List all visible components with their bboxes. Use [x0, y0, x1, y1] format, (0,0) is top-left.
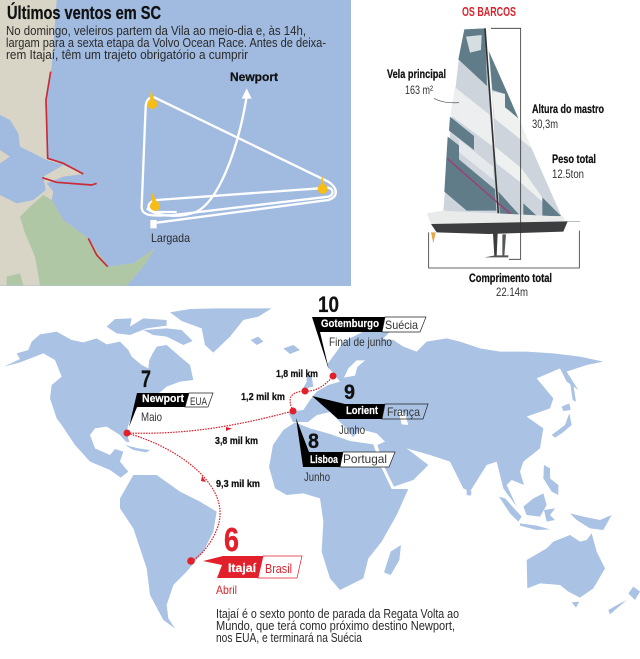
Arctic islands: [107, 318, 167, 335]
callout: stop 9 Lorient: 9: [344, 381, 355, 404]
route: Newport to Lisboa: [127, 411, 293, 433]
callout: stop 8 Lisboa: Junho: [304, 470, 330, 484]
icon: start marker: [150, 220, 157, 228]
Java: [520, 523, 550, 530]
callout: stop 8 Lisboa: [296, 418, 395, 484]
route stops: [124, 372, 336, 565]
Borneo: [523, 493, 547, 517]
text block: closing note: nos EUA, e terminará na Suécia: [216, 631, 362, 645]
jib: [488, 50, 562, 217]
text block: intro: [6, 24, 326, 62]
Greenland: [170, 308, 272, 353]
Australia: [527, 533, 605, 598]
pointer: sail: [434, 98, 459, 103]
callout: stop 6 Itajaí: 6: [224, 521, 239, 558]
Iceland: [283, 345, 300, 354]
icon: arrow head: [242, 88, 252, 99]
callout: stop 9 Lorient: [312, 381, 428, 437]
icon: buoys: [147, 90, 328, 211]
callout: stop 6 Itajaí: Abril: [216, 583, 237, 597]
water: bay and river: [0, 115, 63, 203]
callout: stop 6 Itajaí: Itajaí: [228, 561, 257, 575]
Madagascar: [384, 545, 401, 575]
callout: stop 9 Lorient: Lorient: [346, 405, 378, 417]
callout: stop 10 Gotemburgo: Gotemburgo: [321, 318, 379, 330]
callout: stop 8 Lisboa: 8: [308, 430, 319, 453]
Baltic Sea: [344, 360, 365, 378]
distance labels: [215, 368, 318, 490]
Sri Lanka: [467, 489, 472, 496]
distance labels: 1,2 mil km: [241, 391, 285, 403]
callout: stop 10 Gotemburgo: [312, 292, 426, 370]
keel: [493, 233, 498, 256]
heading: os barcos: OS BARCOS: [462, 5, 516, 19]
logo: [466, 35, 482, 53]
text block: intro: rem Itajaí, têm um trajeto obrigatório a cumprir: [6, 48, 248, 62]
icon: route arrowheads: [201, 427, 232, 482]
Japan: [552, 403, 572, 438]
Sulawesi: [544, 508, 555, 522]
rudder: [431, 232, 436, 243]
main sail: [443, 28, 502, 217]
text block: closing note: Mundo, que terá como próximo destino Newport,: [216, 619, 455, 633]
red lines: protected coast: [42, 72, 108, 267]
callout: stop 7 Newport: EUA: [190, 396, 207, 408]
callout: stop 7 Newport: Newport: [142, 393, 184, 405]
heading: Últimos ventos em SC: [7, 2, 161, 23]
New Guinea: [570, 513, 612, 530]
label: total length: 22.14m: [496, 285, 528, 299]
route: Lorient to Gotemburgo: [305, 376, 333, 391]
Americas: [4, 308, 272, 628]
callout: stop 10 Gotemburgo: Suécia: [385, 318, 418, 332]
routes: [127, 376, 333, 561]
label: main sail: [387, 69, 446, 97]
Eurasia: [288, 338, 603, 507]
mast: [485, 28, 498, 213]
callout: stop 9 Lorient: França: [387, 405, 420, 419]
Africa: [269, 422, 408, 590]
panel: Santa Catarina coastal map: [0, 0, 351, 286]
callout: stop 8 Lisboa: Portugal: [343, 452, 387, 466]
callout: stop 10 Gotemburgo: Final de junho: [329, 335, 392, 349]
label: total weight: 12.5ton: [552, 167, 584, 181]
world map: [4, 308, 640, 628]
label: main sail: Vela principal: [387, 69, 446, 81]
text block: intro: largam para a sexta etapa da Volvo Ocean Race. Antes de deixa-: [6, 36, 326, 50]
label: Newport: Newport: [230, 72, 278, 84]
callout: stop 6 Itajaí: Brasil: [265, 562, 292, 576]
dimension lines: [429, 28, 579, 268]
Iceland: [251, 337, 263, 345]
text block: closing note: Itajaí é o sexto ponto de parada da Regata Volta ao: [216, 607, 459, 621]
label: total weight: Peso total: [552, 154, 596, 166]
land: coast: [0, 0, 155, 286]
label: mast height: Altura do mastro: [532, 104, 604, 116]
land: green hills: [20, 195, 155, 286]
illustration: sailboat: [427, 28, 580, 268]
Sumatra: [499, 497, 522, 522]
label: total length: [469, 273, 552, 299]
North America: [4, 332, 193, 478]
text block: closing note: [216, 607, 459, 645]
route: race course: [142, 97, 336, 223]
label: total length: Comprimento total: [469, 273, 552, 285]
Philippines: [543, 465, 558, 495]
land: jetty: [63, 167, 82, 174]
label: mast height: [532, 104, 604, 131]
callout: stop 9 Lorient: Junho: [339, 423, 365, 437]
label: Largada: Largada: [151, 231, 190, 245]
callout: stop 10 Gotemburgo: 10: [318, 292, 339, 317]
Caspian Sea: [398, 410, 408, 425]
label: total weight: [552, 154, 596, 181]
Sakhalin: [570, 382, 576, 402]
callout: stop 6 Itajaí: [203, 521, 302, 597]
Caribbean: [125, 445, 150, 452]
text block: intro: No domingo, veleiros partem da Vila ao meio-dia e, às 14h,: [6, 24, 306, 38]
South America: [120, 475, 217, 628]
distance labels: 3,8 mil km: [215, 435, 258, 447]
Europe, Asia, Africa and Oceania: [269, 330, 640, 614]
label: mast height: 30,3m: [532, 117, 558, 131]
callout: stop 7 Newport: [129, 366, 213, 427]
Tasmania: [572, 602, 579, 608]
callout: stop 8 Lisboa: Lisboa: [310, 454, 339, 466]
route: Itajaí to Newport: [127, 433, 220, 561]
land: green patch: [7, 273, 23, 286]
deck and hull: [427, 211, 565, 224]
callout: stop 7 Newport: 7: [141, 366, 151, 393]
callout: stop 7 Newport: Maio: [141, 410, 162, 424]
New Zealand: [608, 587, 640, 614]
Baffin Island: [143, 328, 193, 345]
Scandinavia: [327, 330, 392, 372]
distance labels: 9,3 mil km: [216, 478, 260, 490]
panel: the boats: [387, 5, 604, 299]
label: main sail: 163 m²: [405, 83, 433, 97]
Britain and Ireland: [303, 372, 313, 389]
distance labels: 1,8 mil km: [276, 368, 318, 380]
route: Lisboa to Lorient: [290, 391, 305, 411]
